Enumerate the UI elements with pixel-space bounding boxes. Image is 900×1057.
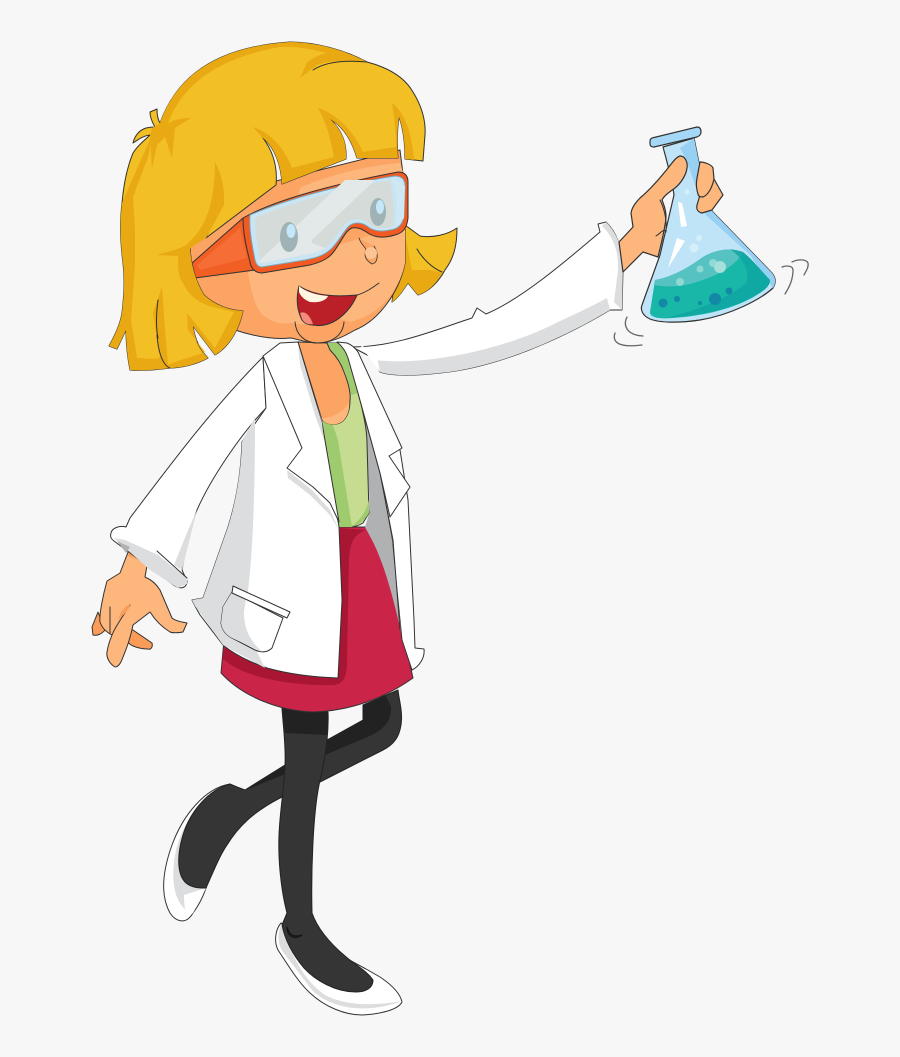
face (190, 150, 405, 343)
left sleeve (111, 357, 266, 588)
right arm sleeve (352, 222, 623, 375)
pocket (221, 586, 290, 652)
goggles strap (192, 218, 255, 278)
skirt (221, 527, 413, 712)
goggles (192, 172, 408, 278)
back hair right piece (392, 225, 457, 302)
green shirt (322, 343, 369, 527)
collar lapels (263, 342, 410, 522)
hair shading (109, 42, 414, 370)
hair (109, 42, 425, 370)
mouth (297, 283, 379, 326)
flask (619, 127, 775, 322)
bubbles (658, 190, 732, 308)
flask glass (641, 138, 775, 322)
back leg and shoe (164, 690, 402, 921)
flask rim (650, 127, 701, 147)
eyes (280, 198, 386, 252)
flask liquid (650, 250, 770, 318)
nose (359, 238, 377, 264)
motion lines (614, 260, 808, 346)
goggles frame (243, 172, 408, 273)
neck and chest skin (298, 342, 350, 424)
thumb and hand (619, 156, 687, 272)
glass highlights (668, 202, 687, 268)
goggles lens (250, 176, 405, 267)
fingers front of flask (696, 162, 723, 213)
lab coat front (192, 342, 342, 678)
left arm hand (92, 547, 187, 667)
lab coat right side panel (352, 348, 424, 670)
front leg and shoe (276, 708, 402, 1015)
